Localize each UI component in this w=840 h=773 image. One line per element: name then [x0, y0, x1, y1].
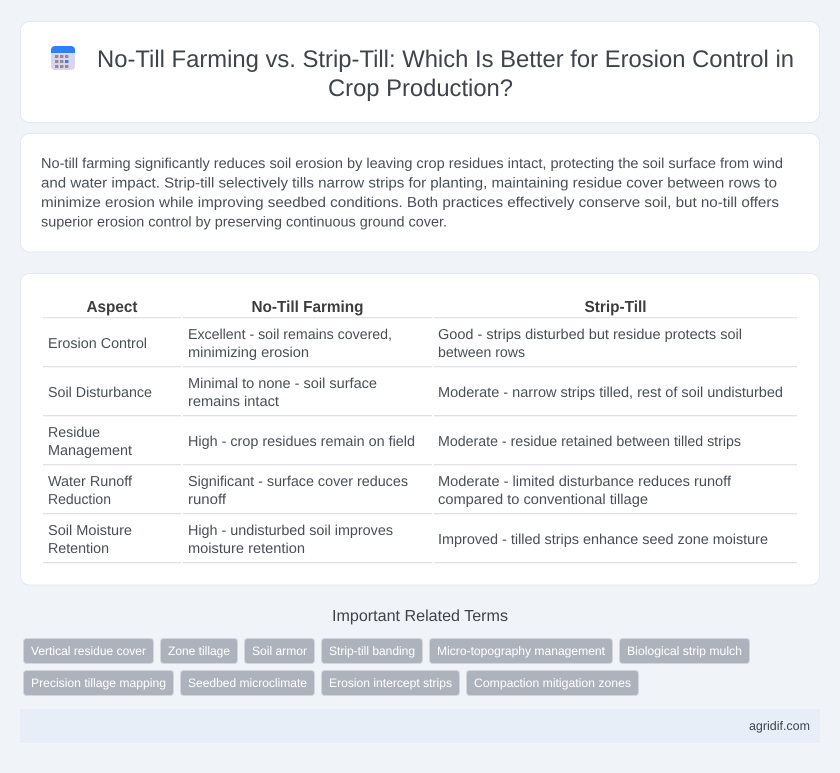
- row: soil moisture retention: moisture retention: [188, 541, 305, 557]
- row: soil moisture retention: Soil Moisture: [48, 523, 132, 539]
- text block: summary: minimize erosion while improving seedbed conditions. Both practices effectively conserve soil, but no-till offers: [41, 195, 779, 211]
- heading: important related terms: Important Related Terms: [332, 608, 508, 625]
- table header: Strip-Till: [584, 299, 646, 316]
- title: No-Till Farming vs. Strip-Till: Which Is Better for Erosion Control in: [97, 46, 794, 73]
- row: water runoff reduction: Significant - surface cover reduces: [188, 474, 408, 490]
- tag: Compaction mitigation zones: [474, 676, 631, 690]
- row: residue management: Management: [48, 443, 132, 459]
- tag: [322, 670, 460, 696]
- footer: [20, 709, 820, 743]
- row: soil moisture retention: [48, 523, 768, 557]
- table header: Aspect: [86, 299, 138, 316]
- row: erosion control: Good - strips disturbed but residue protects soil: [438, 327, 742, 343]
- table header: No-Till Farming: [252, 299, 364, 316]
- tag: Zone tillage: [168, 644, 230, 658]
- row: residue management: Residue: [48, 425, 100, 441]
- tag: [244, 638, 314, 664]
- row: water runoff reduction: compared to conventional tillage: [438, 492, 648, 508]
- tag: Vertical residue cover: [31, 644, 146, 658]
- tag: Erosion intercept strips: [329, 676, 452, 690]
- row: soil disturbance: [48, 376, 783, 410]
- row: erosion control: between rows: [438, 345, 525, 361]
- icon: calendar: [51, 46, 75, 70]
- title: Crop Production?: [328, 75, 513, 102]
- text block: summary: [41, 156, 783, 230]
- tag: [466, 670, 638, 696]
- row: erosion control: minimizing erosion: [188, 345, 309, 361]
- row: soil disturbance: Soil Disturbance: [48, 385, 152, 401]
- text block: summary: and water impact. Strip-till selectively tills narrow strips for planting, maintaining residue cover between rows to: [41, 176, 777, 192]
- row: residue management: High - crop residues remain on field: [188, 434, 415, 450]
- tag: [160, 638, 238, 664]
- tag: [620, 638, 750, 664]
- tag: [24, 638, 154, 664]
- row: water runoff reduction: Reduction: [48, 492, 111, 508]
- row: soil moisture retention: High - undisturbed soil improves: [188, 523, 393, 539]
- panel: header: [20, 22, 820, 122]
- tag: Strip-till banding: [329, 644, 415, 658]
- row: erosion control: Excellent - soil remains covered,: [188, 327, 392, 343]
- footer source text: agridif.com: [749, 719, 810, 733]
- row: water runoff reduction: Water Runoff: [48, 474, 133, 490]
- row: residue management: Moderate - residue retained between tilled strips: [438, 434, 741, 450]
- tag: Precision tillage mapping: [31, 676, 166, 690]
- panel: comparison table: [20, 274, 820, 585]
- row: soil disturbance: Moderate - narrow strips tilled, rest of soil undisturbed: [438, 385, 783, 401]
- tag: Micro-topography management: [437, 644, 606, 658]
- row: soil moisture retention: Retention: [48, 541, 109, 557]
- row: water runoff reduction: Moderate - limited disturbance reduces runoff: [438, 474, 732, 490]
- text block: summary: No-till farming significantly reduces soil erosion by leaving crop residues intact, protecting the soil surface from wind: [41, 156, 783, 172]
- tag: Soil armor: [252, 644, 307, 658]
- row: erosion control: [48, 327, 742, 361]
- tag: [322, 638, 422, 664]
- row: water runoff reduction: runoff: [188, 492, 227, 508]
- title: [97, 46, 794, 102]
- table header: [86, 299, 646, 316]
- row: residue management: [48, 425, 741, 459]
- row: water runoff reduction: [48, 474, 732, 508]
- text block: summary: superior erosion control by preserving continuous ground cover.: [41, 214, 447, 230]
- panel: summary paragraph: [20, 134, 820, 252]
- row: erosion control: Erosion Control: [48, 336, 147, 352]
- tag: Biological strip mulch: [627, 644, 742, 658]
- tag: [180, 670, 314, 696]
- tag: [430, 638, 612, 664]
- row: soil disturbance: Minimal to none - soil surface: [188, 376, 377, 392]
- row: soil moisture retention: Improved - tilled strips enhance seed zone moisture: [438, 532, 768, 548]
- tags: related terms: [24, 638, 750, 696]
- tag: Seedbed microclimate: [188, 676, 307, 690]
- row: soil disturbance: remains intact: [188, 394, 279, 410]
- tag: [24, 670, 174, 696]
